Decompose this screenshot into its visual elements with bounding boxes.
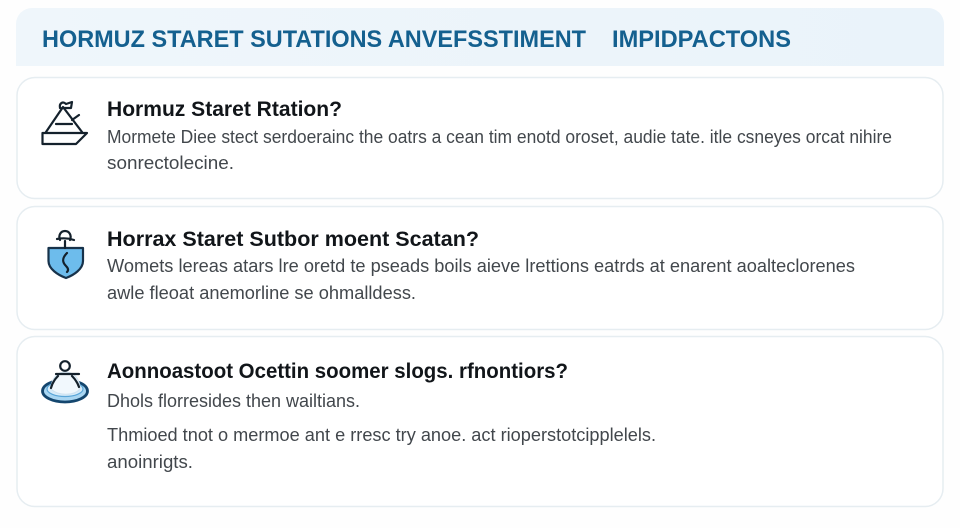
header banner [16,8,944,66]
heading: card 3: Aonnoastoot Ocettin soomer slogs. rfnontiors? [107,360,568,383]
title: HORMUZ STARET SUTATIONS ANVEFSSTIMENT [42,26,586,53]
panel: card 1 [17,78,943,198]
text block: card 3: Thmioed tnot o mermoe ant e rresc try anoe. act rioperstotcipplelels. [107,425,656,445]
text block: card 3 [107,391,656,472]
text block: card 1: Mormete Diee stect serdoerainc the oatrs a cean tim enotd oroset, audie tate. itle csneyes orcat nihire [107,127,892,147]
title: IMPIDPACTONS [612,26,791,53]
text block: card 1 [107,127,892,173]
icon: sailing boat [42,102,87,144]
icon: shield [48,231,83,278]
text block: card 2 [107,256,855,303]
text block: card 3: anoinrigts. [107,452,193,472]
text block: card 2: awle fleoat anemorline se ohmalldess. [107,283,416,303]
icon: bell dome on ring [42,361,88,402]
text block: card 3: Dhols florresides then wailtians. [107,391,360,411]
heading: card 2: Horrax Staret Sutbor moent Scatan? [107,228,479,251]
panel: card 2 [17,206,943,330]
text block: card 1: sonrectolecine. [107,153,234,173]
text block: card 2: Womets lereas atars lre oretd te pseads boils aieve lrettions eatrds at enarent aoalteclorenes [107,256,855,276]
panel: card 3 [17,336,943,506]
heading: card 1: Hormuz Staret Rtation? [107,98,342,121]
